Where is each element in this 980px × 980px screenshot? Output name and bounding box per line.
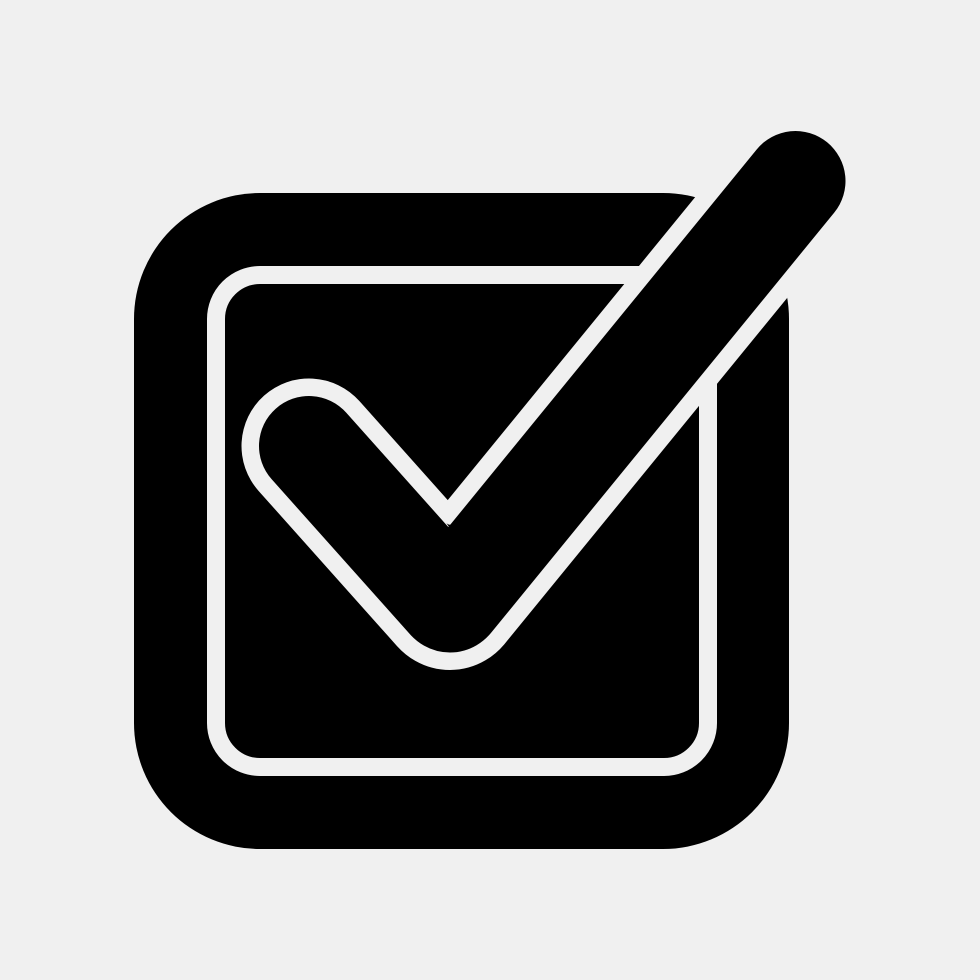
icon: check mark halo — [309, 181, 796, 602]
icon: outer rounded square — [134, 193, 789, 849]
icon: inner square outline — [216, 275, 708, 767]
icon: check mark — [309, 181, 796, 602]
